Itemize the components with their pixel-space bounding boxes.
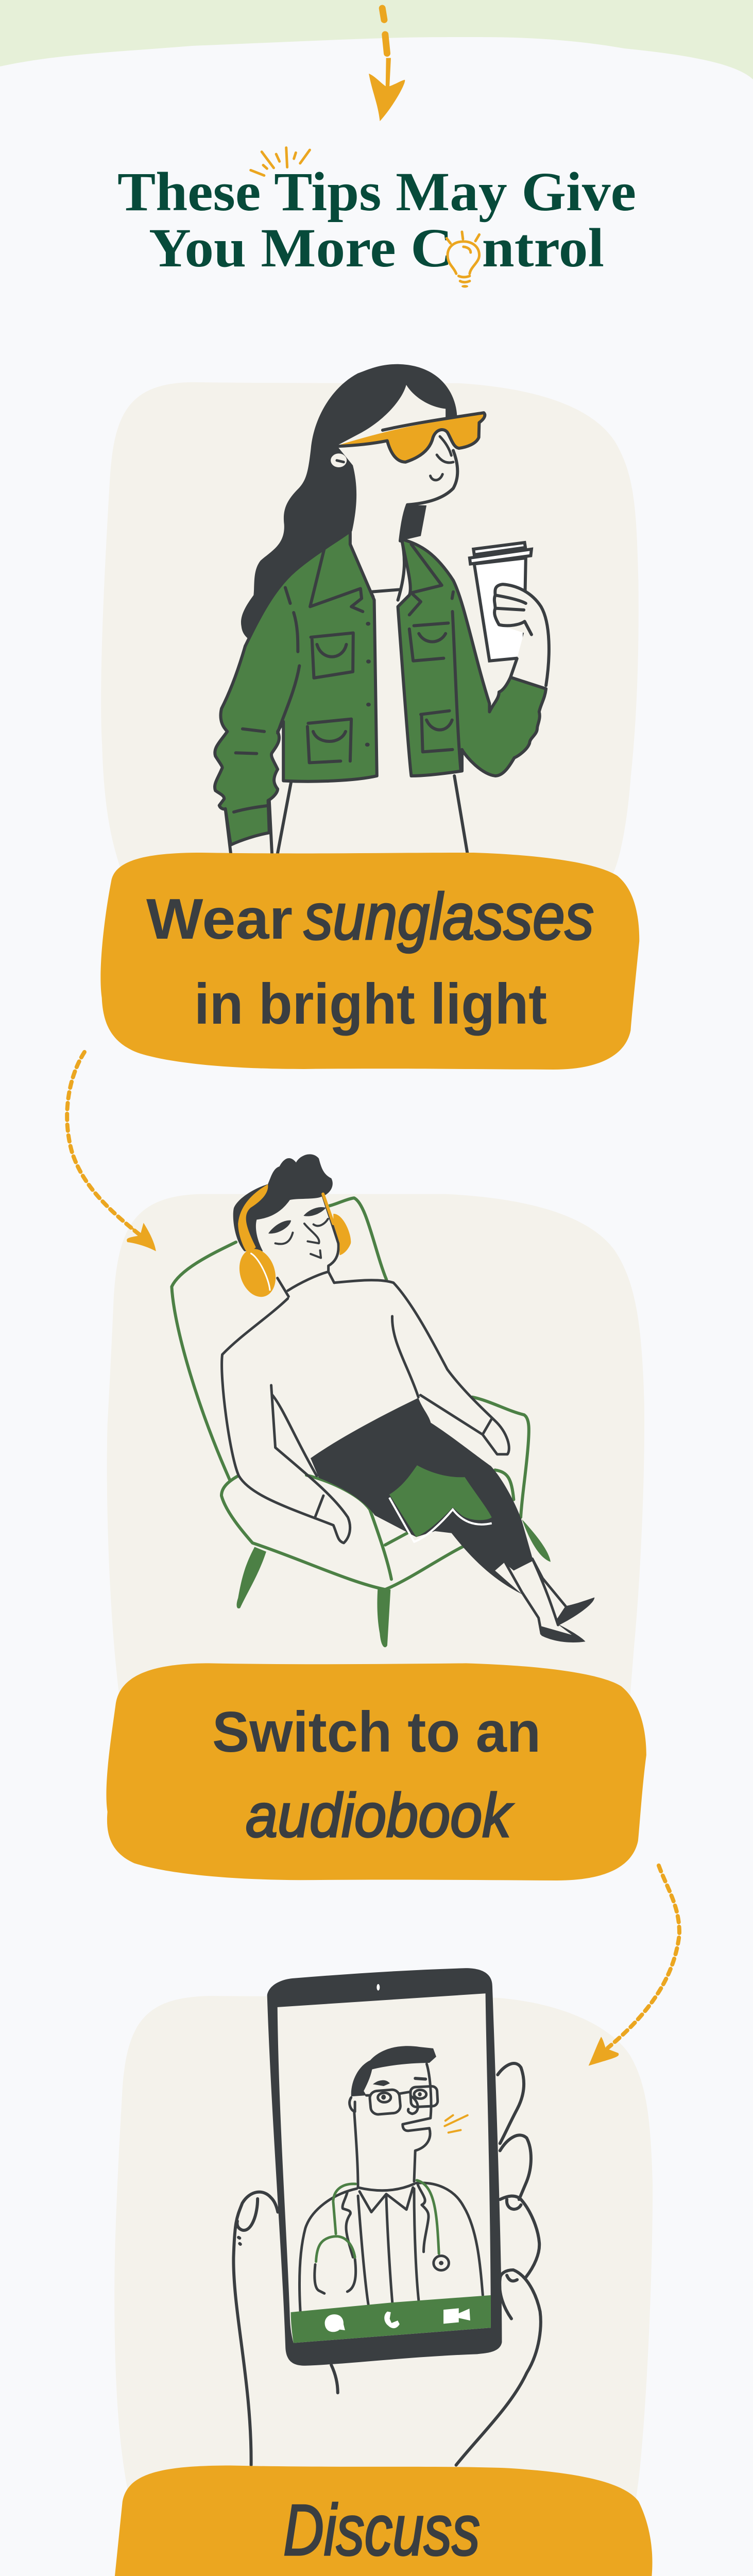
lower legs and shoes [505,1559,594,1642]
callout: switch to an audiobook: Switch to an [212,1700,541,1764]
back of hair behind neck [400,505,426,541]
panel: audiobook illustration backdrop [107,1194,644,1701]
title: You More C ontrol [149,218,604,279]
callout: discuss treatment options: Discuss [283,2489,480,2570]
pants [311,1398,533,1594]
jacket right side [398,539,546,776]
jacket left side [215,531,377,845]
icon: light bulb [447,232,480,287]
arrow: dashed arrow to second tip [67,1052,156,1251]
title: These Tips May Give [117,162,636,223]
phone screen [278,1993,491,2343]
icon: phone [384,2312,400,2328]
arrow: top dashed arrow [369,8,405,121]
hand holding cup [494,584,549,686]
arrow: dashed arrow to third tip [589,1866,679,2066]
title [117,162,636,279]
body outline [222,1196,509,1543]
callout: wear sunglasses in bright light: Wear [146,887,293,951]
headphones [234,1184,351,1301]
doctor [299,2046,483,2312]
callout: wear sunglasses in bright light: in bright light [194,972,547,1036]
panel: telehealth illustration backdrop [114,1996,653,2517]
armchair legs [237,1519,551,1647]
top green band [0,0,753,79]
callout: discuss treatment options [113,2466,653,2576]
face outline [400,451,457,541]
hair [233,1154,333,1251]
face [268,1207,328,1258]
panel: woman illustration backdrop [101,382,639,876]
phone body [267,1968,502,2366]
icon: video [443,2308,470,2324]
callout: wear sunglasses in bright light: sunglasses [304,880,594,953]
icon: sunburst above title [251,148,310,176]
hand [233,2063,541,2465]
hair [241,364,457,639]
armchair [172,1198,529,1589]
jacket details: lapels, seams, pockets, buttons [234,544,461,812]
callout: wear sunglasses in bright light [100,853,639,1070]
callout: switch to an audiobook [106,1663,646,1880]
illustration: hand holding phone with doctor video call [233,1968,541,2465]
callout: switch to an audiobook: audiobook [246,1781,514,1850]
book [389,1465,492,1542]
call bar [291,2295,491,2343]
eye and smile [431,436,453,480]
coffee cup [470,543,532,661]
shirt neckline and hem [226,539,467,853]
icon: chat [325,2314,345,2332]
illustration: woman in sunglasses with coffee [215,364,549,853]
illustration: man in armchair with headphones [172,1154,594,1647]
ear [331,453,347,467]
sunglasses [337,413,485,462]
